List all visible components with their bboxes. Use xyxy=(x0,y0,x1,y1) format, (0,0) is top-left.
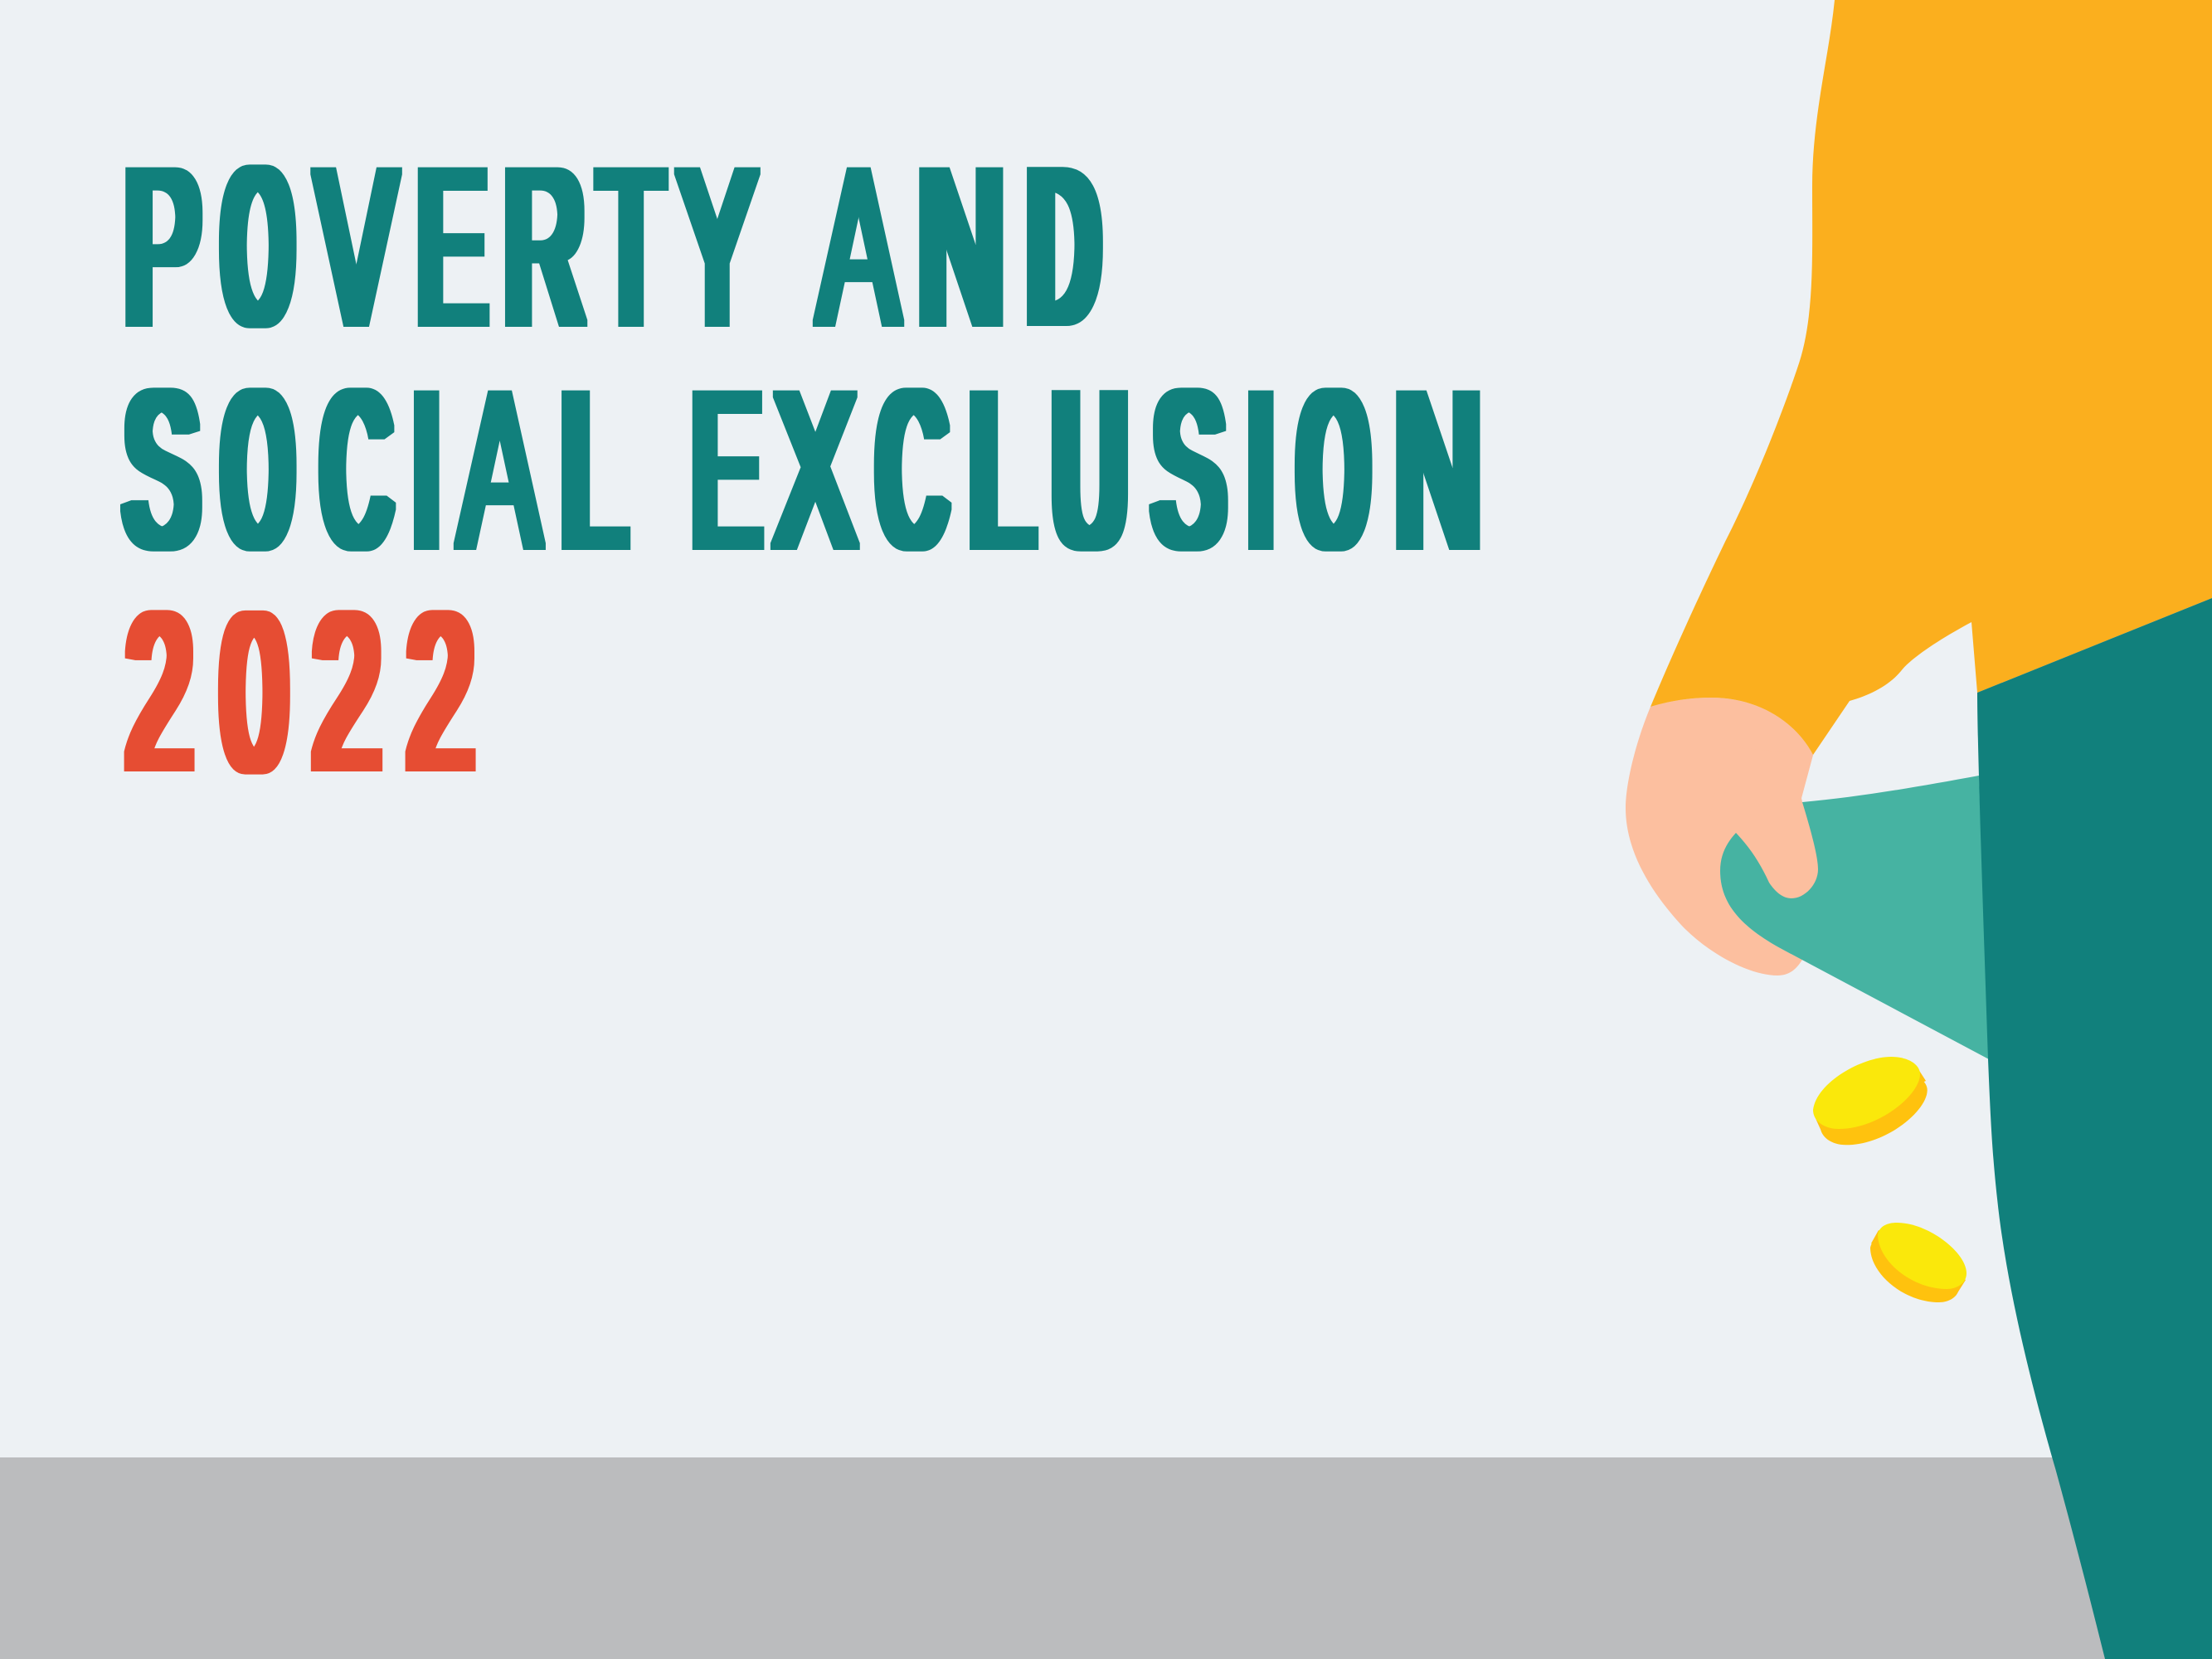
title line 1: R xyxy=(504,121,584,370)
title line 2: L xyxy=(561,345,625,594)
pocket lining xyxy=(1720,776,1989,1059)
title line 2: S xyxy=(1152,353,1226,615)
title line 2 xyxy=(120,345,1481,753)
fingers over pocket xyxy=(1709,747,1818,898)
teal trousers xyxy=(1977,598,2212,1659)
title line 2: C xyxy=(875,353,949,615)
title line 2: N xyxy=(1395,345,1481,594)
title line 3: year: 2 xyxy=(124,576,195,838)
title line 3: year: 2 xyxy=(405,576,476,838)
title line 2: O xyxy=(221,353,294,615)
title line 2: C xyxy=(319,353,393,615)
title line 1: A xyxy=(818,121,899,370)
title line 2: A xyxy=(459,345,541,594)
title line 3: year xyxy=(124,567,476,838)
title line 3: year: 0 xyxy=(222,567,286,816)
orange sleeve and shirt xyxy=(1650,0,2212,755)
title line 1: T xyxy=(599,121,663,370)
coin upper xyxy=(1813,1057,1928,1145)
title line 2: U xyxy=(1051,353,1129,615)
title line 2: I xyxy=(412,345,441,594)
title line 2: L xyxy=(969,345,1033,594)
title: Poverty and Social Exclusion 2022 xyxy=(120,121,1481,838)
title line 1: Y xyxy=(678,121,756,370)
title line 2: S xyxy=(124,353,200,615)
title line 1: E xyxy=(417,121,486,370)
title line 2: X xyxy=(775,345,855,594)
title line 3: year: 2 xyxy=(310,576,383,838)
hand xyxy=(1626,698,1813,975)
title line 1: O xyxy=(221,130,294,392)
title line 1 xyxy=(120,121,1373,753)
floor band xyxy=(0,1457,2212,1659)
title line 1: D xyxy=(1025,130,1101,392)
coin lower xyxy=(1870,1223,1966,1302)
title line 1: V xyxy=(317,121,396,370)
title line 2: E xyxy=(692,345,761,594)
title line 1: N xyxy=(918,121,1004,370)
title line 1: P xyxy=(124,121,201,370)
title line 2: O xyxy=(1296,353,1371,615)
title line 2: I xyxy=(1247,345,1275,594)
